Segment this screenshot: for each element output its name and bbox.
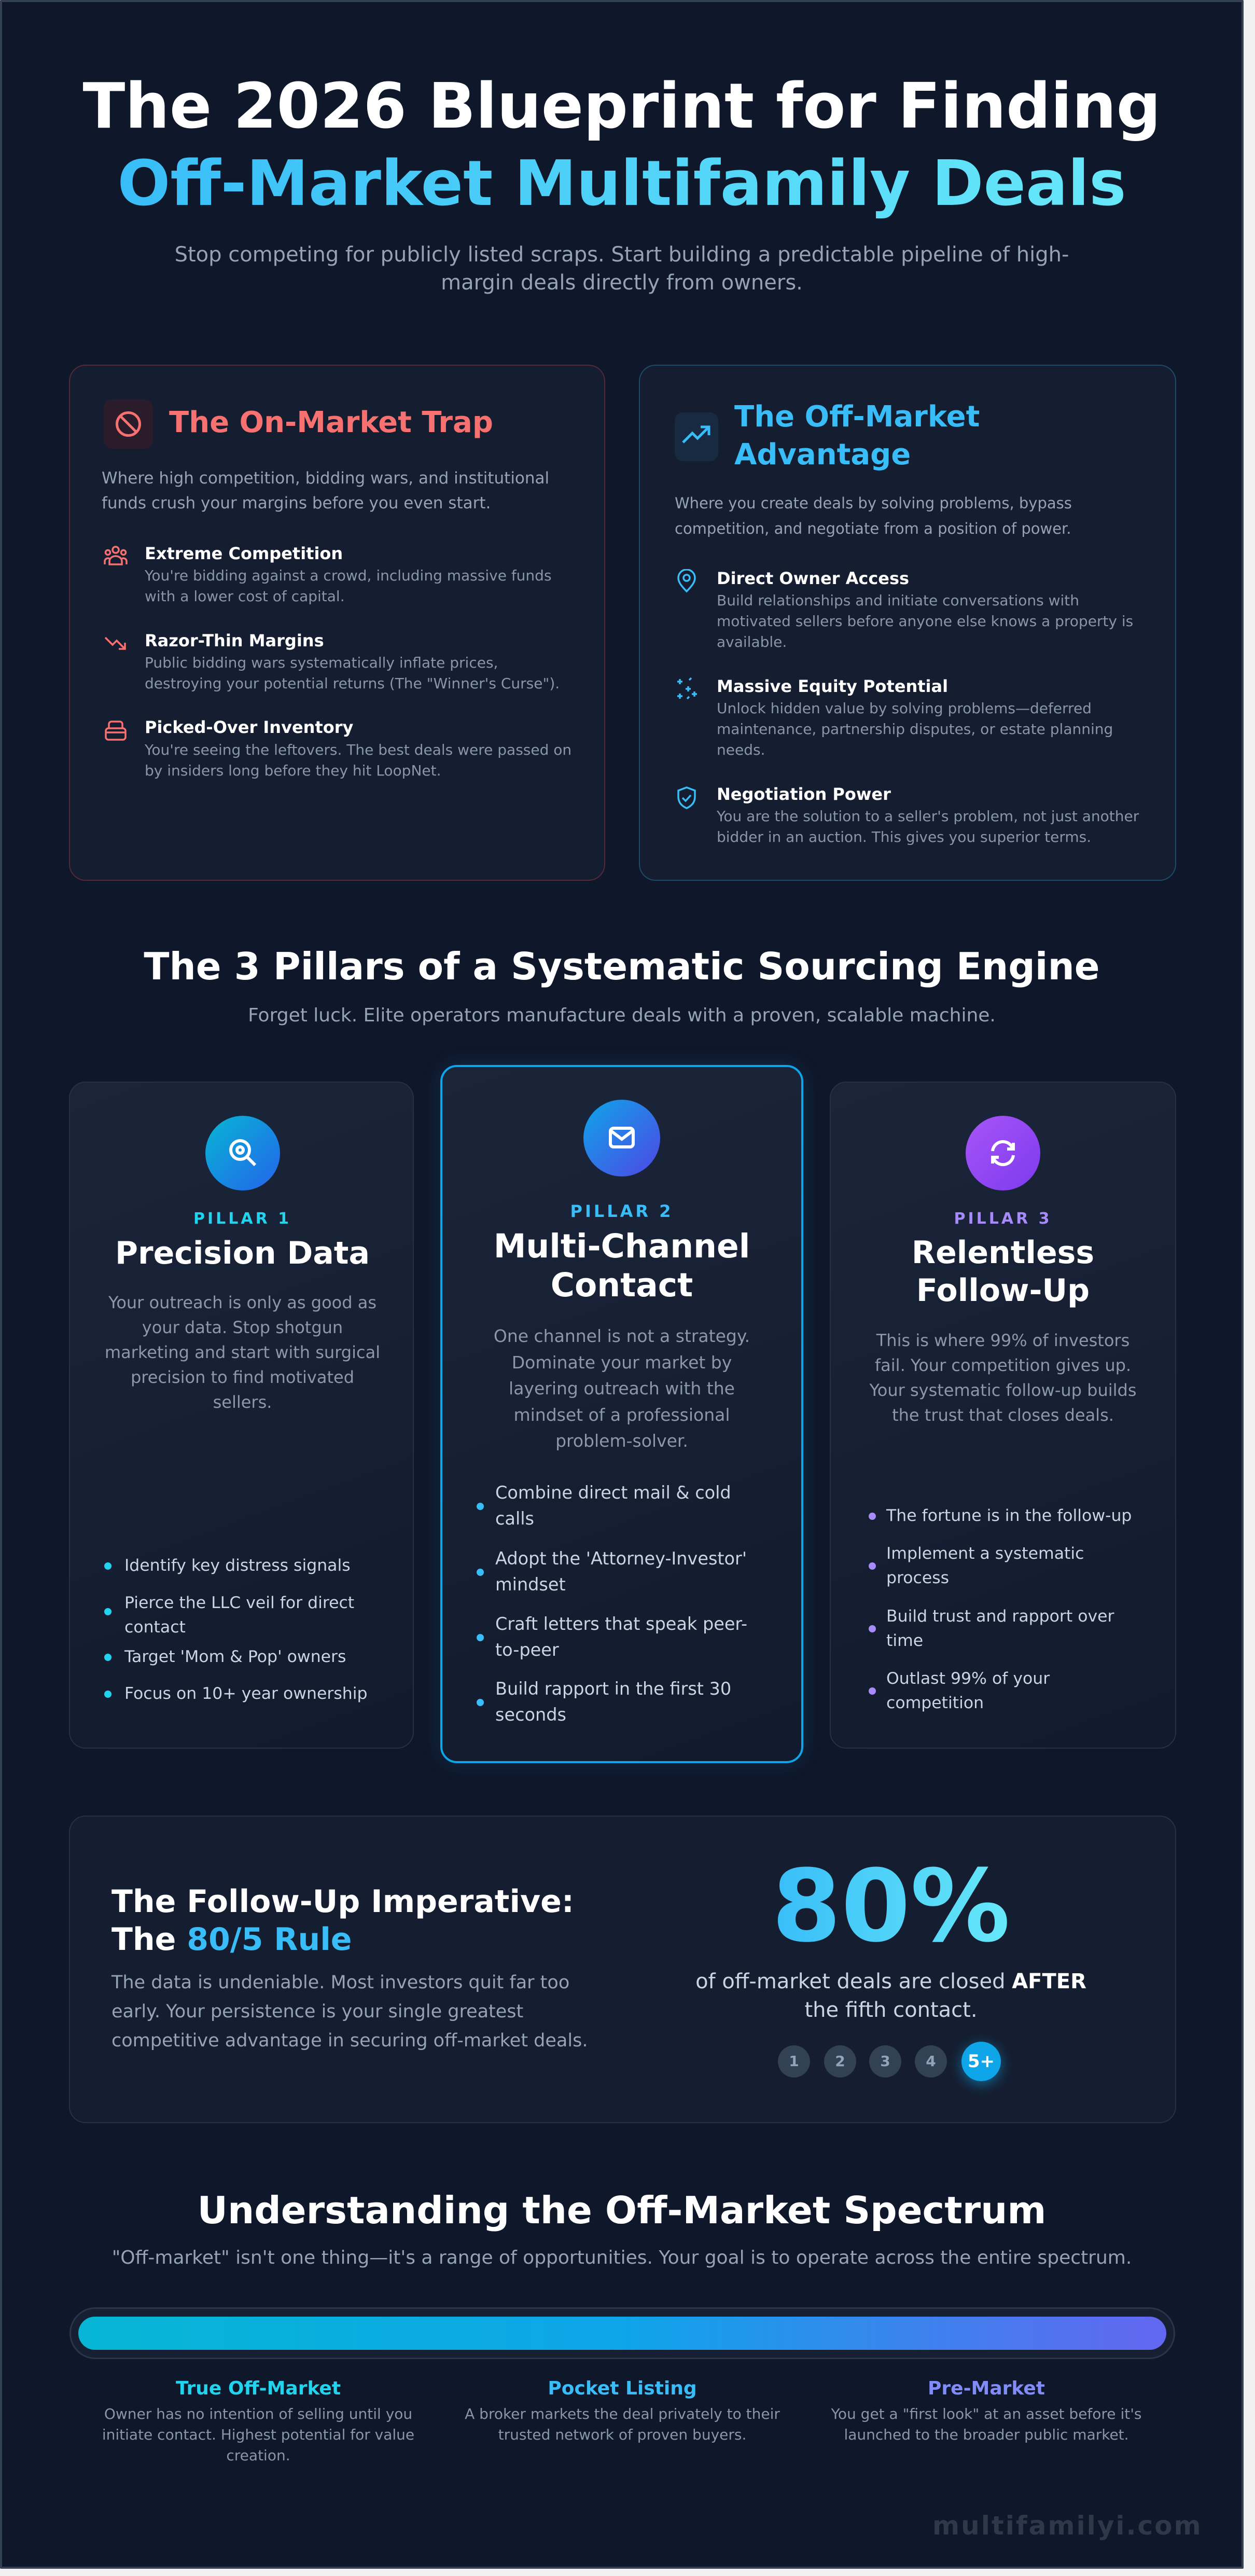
icon: trending up	[675, 412, 718, 461]
list: pillar 1 bullets: Focus on 10+ year ownership	[124, 1684, 367, 1703]
item: picked-over inventory: Picked-Over Inventory	[145, 717, 353, 737]
text: pillar 2 description: Dominate your market by	[512, 1352, 732, 1373]
subtitle: pillars: Forget luck. Elite operators manufacture deals with a proven, scalable machine.	[248, 1005, 996, 1026]
item: massive equity potential: Massive Equity Potential	[717, 676, 948, 696]
text: pillar 1 description: sellers.	[213, 1392, 272, 1412]
panel: pillar 2	[440, 1065, 803, 1763]
column: pocket listing	[441, 2377, 804, 2445]
item: direct owner access: motivated sellers before anyone else knows a property is	[717, 613, 1133, 630]
list: pillar 3 bullets: competition	[886, 1694, 984, 1712]
text: pillar 1 description: your data. Stop shotgun	[142, 1318, 343, 1337]
list: pillar 2 bullets: seconds	[495, 1705, 566, 1725]
text: pillar 3 description	[869, 1331, 1137, 1425]
heading: relentless follow-up: Relentless	[912, 1235, 1094, 1271]
subtitle: spectrum: "Off-market" isn't one thing—it's a range of opportunities. Your goal is to operate across the entire spectrum.	[112, 2247, 1132, 2268]
icon: inbox	[105, 721, 127, 741]
list: pillar 2 bullets: Combine direct mail & cold	[495, 1483, 731, 1503]
chart: contact dots: 1	[789, 2053, 799, 2070]
chart: spectrum bar	[69, 2307, 1175, 2359]
item: extreme competition: with a lower cost of capital.	[145, 588, 345, 605]
subtitle: margin deals directly from owners.	[441, 271, 803, 295]
icon: trending down	[105, 637, 126, 650]
column: pre-market: You get a "first look" at an asset before it's	[831, 2405, 1141, 2422]
text: follow-up description	[111, 1972, 588, 2051]
heading: 3 pillars: The 3 Pillars of a Systematic Sourcing Engine	[144, 945, 1100, 988]
title	[83, 71, 1161, 220]
item: picked-over inventory	[105, 717, 571, 779]
item: extreme competition: You're bidding against a crowd, including massive funds	[145, 567, 552, 584]
text: pillar 2 description: mindset of a professional	[513, 1405, 730, 1424]
column: pocket listing: Pocket Listing	[548, 2378, 697, 2399]
list: pillar 2 bullets: to-peer	[495, 1640, 559, 1660]
text: pillar 1 description	[105, 1293, 380, 1412]
column: pre-market: launched to the broader public market.	[844, 2426, 1129, 2443]
icon: sparkles	[677, 677, 697, 699]
list: pillar 3 bullets: Build trust and rapport over	[886, 1607, 1114, 1626]
item: negotiation power: You are the solution to a seller's problem, not just another	[717, 808, 1139, 825]
label: pillar 2: PILLAR 2	[570, 1201, 673, 1221]
item: direct owner access: available.	[717, 633, 787, 650]
list: pillar 1 bullets: Pierce the LLC veil for direct	[124, 1594, 354, 1612]
chart: contact dots	[775, 2041, 1003, 2087]
heading: multi-channel contact	[494, 1227, 750, 1304]
text: follow-up description: competitive advantage in securing off-market deals.	[111, 2030, 588, 2051]
list: pillar 2 bullets: Build rapport in the first 30	[495, 1679, 731, 1699]
text: pillar 1 description: Your outreach is only as good as	[108, 1293, 376, 1312]
item: direct owner access	[677, 569, 1133, 650]
list: pillar 1 bullets	[104, 1556, 367, 1703]
label: pillar 1: PILLAR 1	[193, 1210, 291, 1228]
subtitle	[175, 243, 1069, 295]
column: pre-market: Pre-Market	[928, 2378, 1045, 2399]
list: pillar 2 bullets: mindset	[495, 1574, 566, 1595]
text: advantage description: Where you create deals by solving problems, bypass	[675, 494, 1072, 512]
icon: mail	[583, 1100, 660, 1176]
text: follow-up description: The data is undeniable. Most investors quit far too	[111, 1972, 569, 1993]
text: pillar 2 description: One channel is not a strategy.	[494, 1326, 750, 1346]
item: direct owner access: Build relationships and initiate conversations with	[717, 592, 1079, 609]
heading: multi-channel contact: Contact	[551, 1266, 693, 1304]
panel: pillar 1	[69, 1082, 414, 1749]
list: pillar 1 bullets: Target 'Mom & Pop' owners	[124, 1647, 346, 1666]
item: massive equity potential: needs.	[717, 741, 765, 758]
icon: map pin	[677, 569, 696, 592]
column: true off-market: True Off-Market	[176, 2378, 341, 2399]
list: pillar 2 bullets: Adopt the 'Attorney-Investor'	[495, 1548, 747, 1569]
text: pillar 3 description: the trust that closes deals.	[892, 1405, 1114, 1425]
text: pillar 2 description: layering outreach with the	[509, 1378, 735, 1398]
list: pillar 2 bullets: calls	[495, 1508, 534, 1529]
list: pillar 3 bullets: Outlast 99% of your	[886, 1669, 1050, 1688]
text: pillar 2 description	[494, 1326, 750, 1451]
text: advantage description	[675, 494, 1072, 537]
item: razor-thin margins	[105, 631, 560, 692]
item: massive equity potential	[677, 676, 1113, 758]
panel: 80/5 rule	[69, 1816, 1176, 2123]
text: trap description: funds crush your margins before you even start.	[102, 494, 491, 513]
icon: refresh	[966, 1116, 1040, 1190]
item: negotiation power: bidder in an auction. This gives you superior terms.	[717, 828, 1091, 846]
list: pillar 2 bullets	[477, 1483, 747, 1725]
item: massive equity potential: Unlock hidden value by solving problems—deferred	[717, 700, 1092, 717]
stat: 80%: 80%	[772, 1849, 1010, 1964]
heading: multi-channel contact: Multi-Channel	[494, 1227, 750, 1265]
item: massive equity potential: maintenance, partnership disputes, or estate planning	[717, 721, 1113, 738]
item: picked-over inventory: by insiders long before they hit LoopNet.	[145, 762, 441, 779]
item: razor-thin margins: destroying your potential returns (The "Winner's Curse").	[145, 675, 560, 692]
text: trap description: Where high competition, bidding wars, and institutional	[102, 469, 549, 488]
watermark: multifamilyi.com	[932, 2511, 1203, 2541]
item: razor-thin margins: Razor-Thin Margins	[145, 631, 324, 650]
heading: relentless follow-up	[912, 1235, 1094, 1309]
column: true off-market: Owner has no intention of selling until you	[104, 2405, 412, 2422]
heading: relentless follow-up: Follow-Up	[916, 1272, 1090, 1309]
column: pocket listing: trusted network of proven buyers.	[498, 2426, 746, 2443]
text: stat caption: the fifth contact.	[804, 1998, 978, 2022]
list: pillar 3 bullets: process	[886, 1569, 949, 1587]
panel: on-market trap	[69, 365, 605, 881]
chart: contact dots: 4	[926, 2053, 936, 2070]
list: pillar 3 bullets: The fortune is in the follow-up	[886, 1506, 1132, 1525]
item: razor-thin margins: Public bidding wars systematically inflate prices,	[145, 654, 498, 671]
chart: contact dots: 2	[835, 2053, 845, 2070]
heading: on-market trap: The On-Market Trap	[169, 406, 493, 439]
icon: ban	[104, 399, 153, 449]
list: pillar 1 bullets: Identify key distress signals	[124, 1556, 351, 1575]
title: Off-Market Multifamily Deals	[117, 148, 1126, 220]
heading: off-market advantage	[734, 400, 980, 472]
text: stat caption	[658, 1968, 1124, 2025]
text: pillar 1 description: marketing and start with surgical	[105, 1342, 380, 1362]
list: pillar 3 bullets	[869, 1506, 1132, 1712]
list: pillar 2 bullets: Craft letters that speak peer-	[495, 1614, 747, 1634]
item: extreme competition: Extreme Competition	[145, 544, 343, 563]
panel: pillar 3	[830, 1082, 1176, 1749]
item: extreme competition	[104, 544, 552, 605]
list: pillar 1 bullets: contact	[124, 1618, 186, 1637]
column: pre-market	[805, 2377, 1168, 2445]
heading: follow-up imperative	[111, 1883, 574, 1958]
item: negotiation power	[677, 784, 1139, 846]
column: true off-market	[77, 2377, 440, 2466]
heading: follow-up imperative: The 80/5 Rule	[111, 1921, 352, 1958]
text: pillar 3 description: Your systematic follow-up builds	[869, 1380, 1137, 1400]
item: picked-over inventory: You're seeing the leftovers. The best deals were passed on	[145, 741, 571, 758]
text: pillar 3 description: fail. Your competition gives up.	[875, 1355, 1131, 1375]
icon: search	[205, 1116, 280, 1190]
heading: precision data: Precision Data	[115, 1235, 370, 1271]
list: pillar 3 bullets: Implement a systematic	[886, 1544, 1084, 1563]
icon: users	[104, 546, 128, 565]
item: direct owner access: Direct Owner Access	[717, 569, 909, 588]
heading: off-market advantage: The Off-Market	[734, 400, 980, 434]
text: pillar 3 description: This is where 99% of investors	[876, 1331, 1130, 1350]
heading: spectrum: Understanding the Off-Market Spectrum	[198, 2189, 1046, 2232]
label: pillar 3: PILLAR 3	[954, 1210, 1052, 1228]
column: pocket listing: A broker markets the deal privately to their	[465, 2405, 780, 2422]
text: follow-up description: early. Your persistence is your single greatest	[111, 2001, 523, 2022]
text: pillar 2 description: problem-solver.	[555, 1431, 688, 1451]
panel: off-market advantage	[639, 365, 1176, 881]
heading: off-market advantage: Advantage	[734, 438, 911, 472]
chart: contact dots: 3	[880, 2053, 890, 2070]
icon: shield check	[677, 786, 696, 809]
heading: follow-up imperative: The Follow-Up Imperative:	[111, 1883, 574, 1920]
text: trap description	[102, 469, 549, 513]
item: negotiation power: Negotiation Power	[717, 784, 891, 804]
text: pillar 1 description: precision to find motivated	[131, 1367, 354, 1387]
title: The 2026 Blueprint for Finding	[83, 71, 1161, 143]
chart: contact dots: 5+	[968, 2051, 995, 2072]
subtitle: Stop competing for publicly listed scraps. Start building a predictable pipeline of high-	[175, 243, 1069, 267]
list: pillar 3 bullets: time	[886, 1631, 923, 1650]
text: stat caption: of off-market deals are closed AFTER	[695, 1970, 1086, 1993]
text: advantage description: competition, and negotiate from a position of power.	[675, 520, 1071, 537]
column: true off-market: initiate contact. Highest potential for value	[102, 2426, 414, 2443]
column: true off-market: creation.	[226, 2447, 290, 2464]
